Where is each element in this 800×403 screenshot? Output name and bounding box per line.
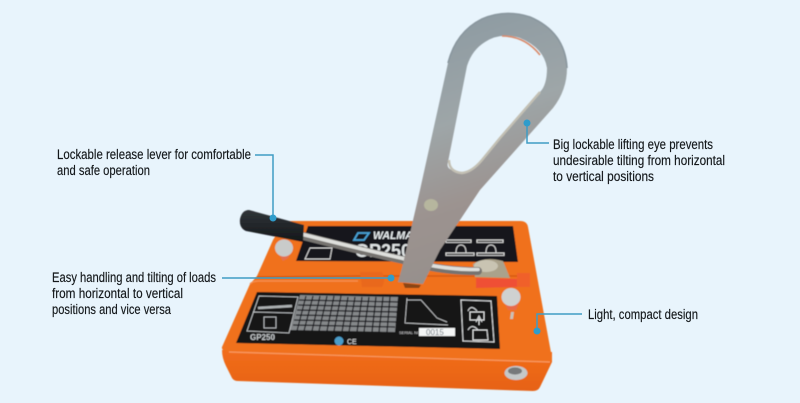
magnet body bbox=[222, 13, 567, 391]
callout: compact design bbox=[534, 307, 698, 334]
easy handling leader bbox=[222, 277, 391, 279]
serial number: 0015 bbox=[426, 328, 444, 337]
lever cam bbox=[473, 259, 510, 278]
brand name: WALMAG bbox=[373, 230, 421, 242]
slot under eye bbox=[403, 283, 421, 288]
handle notch bbox=[360, 272, 384, 287]
lock pictograms bbox=[461, 300, 494, 342]
eye pivot bolt bbox=[424, 199, 438, 211]
lock pin left bbox=[275, 240, 293, 261]
callout: release lever bbox=[57, 147, 276, 222]
serial number: SERIAL NO. bbox=[399, 330, 421, 335]
lever grip bbox=[240, 210, 304, 242]
load chart bbox=[405, 298, 448, 325]
release lever text: Lockable release lever for comfortable bbox=[57, 147, 251, 162]
right notch bbox=[517, 273, 530, 287]
lifting eye bbox=[398, 13, 567, 284]
front edge highlight bbox=[229, 352, 550, 362]
serial number bbox=[399, 328, 455, 337]
compact design text: Light, compact design bbox=[588, 307, 698, 322]
release lever leader bbox=[255, 155, 273, 218]
lifting eye text: undesirable tilting from horizontal bbox=[553, 153, 725, 168]
lifting eye leader bbox=[527, 123, 549, 143]
release lever text: and safe operation bbox=[57, 163, 150, 178]
lever rod bbox=[303, 234, 478, 271]
top surface bbox=[222, 221, 552, 362]
callout: lifting eye bbox=[524, 120, 725, 184]
front face bbox=[222, 350, 552, 391]
brand logo bbox=[354, 233, 369, 240]
magnet diagram bbox=[247, 296, 298, 333]
lifting eye text: to vertical positions bbox=[553, 169, 654, 184]
certification badge bbox=[334, 336, 344, 346]
model plate: GP250 bbox=[250, 333, 275, 342]
easy handling text: positions and vice versa bbox=[52, 302, 171, 317]
eye inner edge bbox=[449, 92, 540, 173]
upper black label bbox=[296, 226, 518, 262]
inner top reflection bbox=[502, 36, 540, 55]
lock pin right bbox=[502, 288, 520, 319]
CE mark: CE bbox=[347, 339, 357, 346]
plate groove bbox=[257, 276, 520, 277]
lifting eye text: Big lockable lifting eye prevents bbox=[553, 137, 713, 152]
lower black label bbox=[236, 292, 500, 349]
load table bbox=[290, 295, 398, 332]
easy handling text: from horizontal to vertical bbox=[52, 286, 183, 301]
compact design leader bbox=[537, 314, 582, 331]
easy handling text: Easy handling and tilting of loads bbox=[52, 270, 216, 285]
upper label pictograms bbox=[305, 240, 504, 259]
front bolt bbox=[504, 366, 528, 380]
model number: GP250 bbox=[355, 241, 411, 261]
callout: easy handling bbox=[52, 270, 394, 317]
eye outer rim bbox=[448, 13, 567, 68]
